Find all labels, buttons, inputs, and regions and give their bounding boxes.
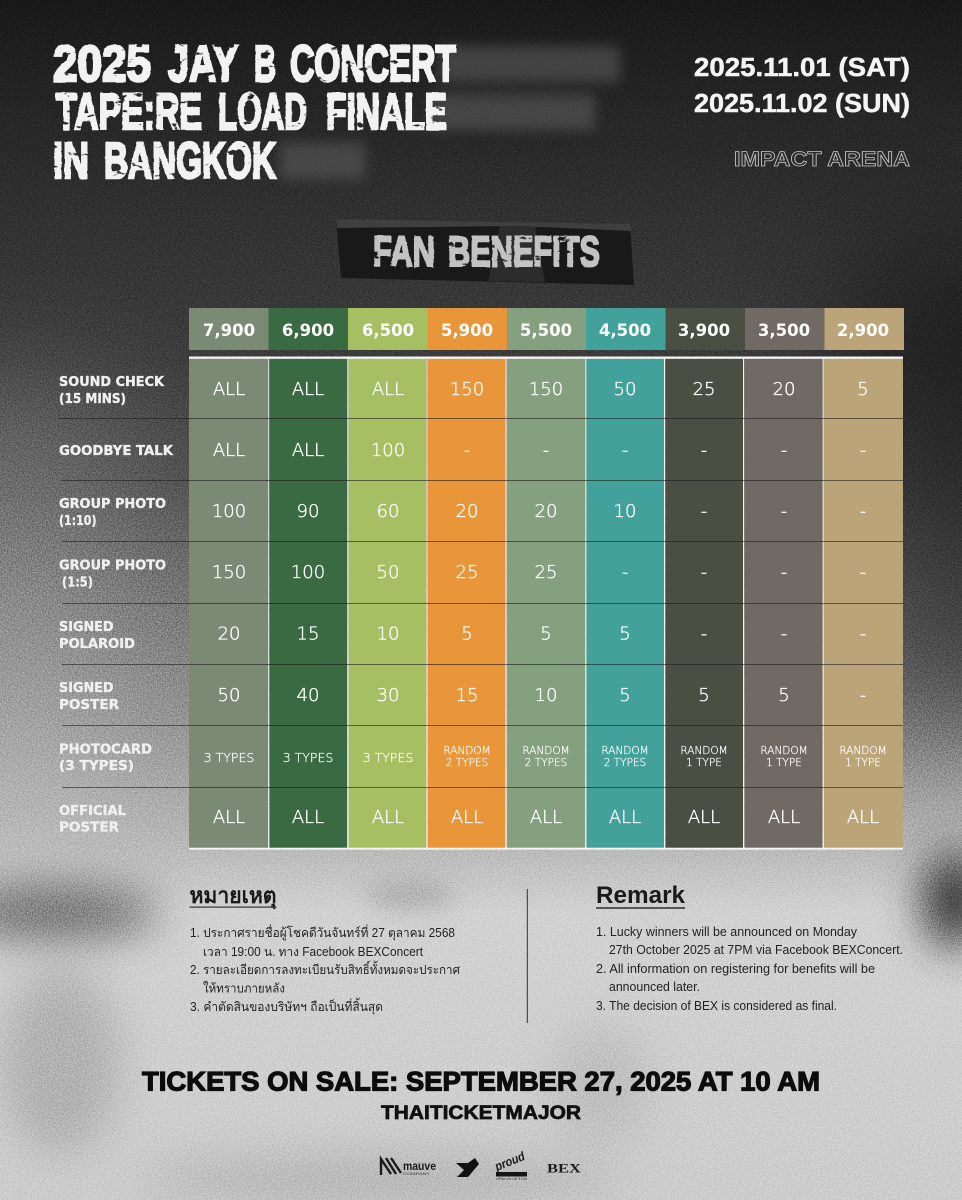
column: 3,500: - (781, 562, 787, 583)
column: 5,500: 10 (535, 685, 557, 706)
column: 2,900: 5 (857, 379, 869, 400)
column: 6,900: 6,900 (282, 321, 334, 340)
column: 5,500: ALL (530, 807, 562, 828)
column: 7,900: ALL (213, 440, 245, 461)
column: 6,500: 3 TYPES (363, 750, 413, 765)
column: 5,900: 2 TYPES (446, 757, 488, 769)
column: 4,500: - (622, 440, 628, 461)
column: 5,500: 2 TYPES (525, 757, 567, 769)
column: 5,900 (428, 308, 507, 848)
fan benefits tape heading: BENEFITS (448, 228, 600, 276)
Thai remarks: 2. รายละเอียดการลงทะเบียนรับสิทธิ์ทั้งหมดจะประกาศ (190, 960, 460, 977)
column: 6,500: 6,500 (362, 321, 414, 340)
column: 6,900: ALL (292, 807, 324, 828)
column: 5,500: 25 (535, 562, 557, 583)
title: 2025 (53, 35, 151, 92)
title: CONCERT (290, 35, 456, 92)
tickets on sale heading: TICKETS ON SALE: SEPTEMBER 27, 2025 AT 10 AM (142, 1066, 820, 1096)
column: 3,900: ALL (688, 807, 720, 828)
column: 6,900: ALL (292, 440, 324, 461)
column: 7,900: 150 (212, 562, 246, 583)
column: 5,500 (507, 308, 586, 848)
title: BANGKOK (104, 132, 276, 189)
column: 6,500: ALL (372, 807, 404, 828)
column: 3,500: ALL (768, 807, 800, 828)
column: 4,500: ALL (609, 807, 641, 828)
logos (381, 1149, 582, 1181)
column: 3,900: 25 (693, 379, 715, 400)
fan benefits tape heading (336, 219, 634, 285)
column: 5,900: 5 (461, 624, 473, 644)
ghost blur behind title (280, 46, 620, 179)
column: 3,500: 20 (773, 379, 795, 400)
logo: proud: proud (492, 1149, 527, 1174)
column: 5,900: 5,900 (441, 321, 493, 340)
column: 3,900: - (701, 624, 707, 644)
row labels: OFFICIAL (59, 804, 126, 819)
column: 5,500: 20 (535, 501, 557, 522)
column: 4,500 (586, 308, 666, 848)
column: 6,500: 100 (371, 440, 405, 461)
column: 7,900: ALL (213, 379, 245, 400)
row labels (59, 375, 174, 836)
column: 2,900: - (860, 440, 866, 461)
venue: IMPACT ARENA (734, 148, 910, 171)
English remarks: Remark (596, 882, 686, 909)
column: 6,900: 15 (297, 624, 319, 644)
column: 3,500: 3,500 (758, 321, 810, 340)
column: 6,900: 3 TYPES (283, 750, 333, 765)
column: 3,900: - (701, 562, 707, 583)
row labels: GROUP PHOTO (59, 558, 166, 574)
Thai remarks: 3. คำตัดสินของบริษัทฯ ถือเป็นที่สิ้นสุด (190, 997, 383, 1015)
column: 2,900: - (860, 624, 866, 644)
column: 3,900: - (701, 440, 707, 461)
row labels: (1:10) (59, 514, 96, 529)
column: 4,500: 4,500 (599, 321, 651, 340)
column: 6,500: 30 (377, 685, 399, 706)
column: 5,900: 150 (450, 379, 484, 400)
row labels: SOUND CHECK (59, 375, 165, 390)
row labels: POSTER (59, 698, 119, 713)
English remarks: 3. The decision of BEX is considered as final. (596, 999, 837, 1013)
column: 2,900: 2,900 (837, 321, 889, 340)
row labels: (3 TYPES) (59, 759, 134, 774)
column: 4,500: 5 (619, 624, 631, 644)
title: LOAD (218, 83, 307, 140)
column: 2,900: RANDOM (839, 745, 887, 757)
column: 3,500: - (781, 624, 787, 644)
column: 5,500: 5,500 (520, 321, 572, 340)
English remarks (596, 882, 903, 1013)
ticket seller: THAITICKETMAJOR (381, 1102, 581, 1124)
column: 2,900 (824, 308, 904, 848)
logo: proud: บริษัท พราวด์ จำกัด (496, 1177, 527, 1181)
logo: proud (492, 1149, 527, 1181)
column: 7,900: ALL (213, 807, 245, 828)
column: 7,900 (189, 308, 268, 848)
column: 3,500: 5 (778, 685, 790, 706)
column: 3,500: - (781, 501, 787, 522)
column: 5,900: 25 (456, 562, 478, 583)
row labels: (15 MINS) (59, 392, 126, 407)
column: 6,500: 10 (377, 624, 399, 644)
column: 3,900 (666, 308, 745, 848)
column: 5,500: RANDOM (522, 745, 570, 757)
Thai remarks: ให้ทราบภายหลัง (203, 982, 285, 996)
divider (527, 889, 528, 1023)
English remarks: 1. Lucky winners will be announced on Monday (596, 925, 858, 939)
logo: mauve company: COMPANY (403, 1171, 430, 1176)
column: 3,900: RANDOM (680, 745, 728, 757)
column: 6,500: 60 (377, 501, 399, 522)
column: 4,500: - (622, 562, 628, 583)
title: IN (53, 132, 89, 189)
column: 4,500: 5 (619, 685, 631, 706)
title: JAY (168, 35, 238, 92)
column: 3,900: 3,900 (678, 321, 730, 340)
column: 5,500: 150 (529, 379, 563, 400)
column: 3,500: RANDOM (760, 745, 808, 757)
column: 4,500: 50 (614, 379, 636, 400)
concert dates (694, 52, 910, 118)
logo: mauve company (381, 1158, 436, 1176)
column: 7,900: 100 (212, 501, 246, 522)
row labels: PHOTOCARD (59, 742, 152, 758)
concert dates: 2025.11.02 (SUN) (694, 88, 910, 118)
column: 2,900: - (860, 562, 866, 583)
Thai remarks: เวลา 19:00 น. ทาง Facebook BEXConcert (203, 945, 423, 959)
row labels: GOODBYE TALK (59, 444, 174, 459)
logo: mauve company: mauve (403, 1161, 436, 1173)
concert dates: 2025.11.01 (SAT) (694, 52, 910, 82)
column: 3,900: 5 (698, 685, 710, 706)
column: 6,900: 100 (291, 562, 325, 583)
column: 5,500: - (543, 440, 549, 461)
logo: BEX: BEX (547, 1160, 582, 1176)
benefits table (189, 308, 904, 848)
column: 4,500: 2 TYPES (604, 757, 646, 769)
title (53, 35, 456, 189)
title: B (254, 35, 276, 92)
column: 3,900: 1 TYPE (686, 757, 722, 769)
column: 6,900: 90 (297, 501, 319, 522)
English remarks: 2. All information on registering for benefits will be (596, 962, 875, 976)
column: 7,900: 50 (218, 685, 240, 706)
column: 7,900: 20 (218, 624, 240, 644)
row labels: POLAROID (59, 637, 135, 652)
column: 7,900: 7,900 (203, 321, 255, 340)
row labels: GROUP PHOTO (59, 497, 166, 512)
column: 6,900 (268, 308, 348, 848)
English remarks: 27th October 2025 at 7PM via Facebook BEXConcert. (609, 943, 903, 957)
column: 6,900: ALL (292, 379, 324, 400)
Thai remarks: หมายเหตุ (190, 883, 276, 910)
column: 5,900: 15 (456, 685, 478, 706)
column: 6,900: 40 (297, 685, 319, 706)
row labels: SIGNED (59, 620, 114, 635)
title: FINALE (326, 83, 447, 140)
column: 2,900: 1 TYPE (845, 757, 881, 769)
row labels: SIGNED (59, 681, 114, 696)
column: 6,500: 50 (377, 562, 399, 583)
column: 5,900: 20 (456, 501, 478, 522)
column: 5,500: 5 (540, 624, 552, 644)
column: 5,900: RANDOM (443, 745, 491, 757)
column: 3,900: - (701, 501, 707, 522)
column: 6,500 (348, 308, 428, 848)
row labels: POSTER (59, 820, 119, 836)
column: 5,900: ALL (451, 807, 483, 828)
column: 7,900: 3 TYPES (204, 750, 254, 765)
column: 3,500: 1 TYPE (766, 757, 802, 769)
column: 2,900: - (860, 501, 866, 522)
column: 6,500: ALL (372, 379, 404, 400)
logo: Y mark (456, 1158, 479, 1177)
column: 2,900: - (860, 685, 866, 706)
column: 5,900: - (464, 440, 470, 461)
English remarks: announced later. (609, 980, 700, 994)
title: TAPE:RE (56, 83, 202, 140)
Thai remarks: 1. ประกาศรายชื่อผู้โชคดีวันจันทร์ที่ 27 ตุลาคม 2568 (190, 924, 455, 941)
column: 3,500: - (781, 440, 787, 461)
column: 4,500: RANDOM (601, 745, 649, 757)
column: 2,900: ALL (847, 807, 879, 828)
Thai remarks (190, 883, 460, 1015)
fan benefits tape heading: FAN (373, 228, 435, 276)
row labels: (1:5) (62, 576, 93, 590)
column: 4,500: 10 (614, 501, 636, 522)
column: 3,500 (744, 308, 824, 848)
